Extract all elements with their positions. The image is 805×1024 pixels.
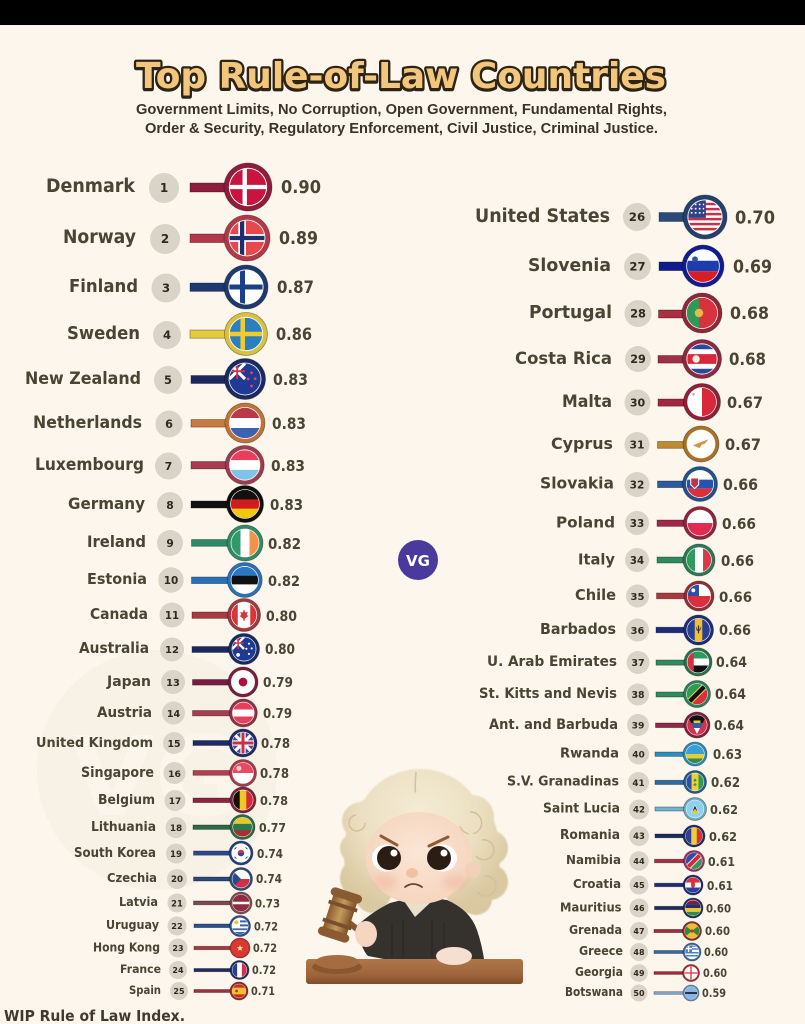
- row: Mauritius: 0.60: [706, 902, 731, 916]
- row: Sweden: [67, 312, 312, 356]
- row: Grenada: 0.60: [705, 924, 730, 938]
- row: Latvia: Latvia: [119, 894, 158, 909]
- row: Croatia: 45: [633, 880, 645, 890]
- row: Greece: Greece: [579, 944, 623, 958]
- row: Rwanda: 40: [632, 750, 645, 760]
- watermark: VG logo circle: VG: [69, 713, 245, 841]
- flag: Cyprus: [687, 430, 715, 458]
- row: Malta: Malta: [562, 392, 612, 411]
- row: Uruguay: 22: [171, 921, 183, 931]
- row: Barbados: [540, 615, 751, 645]
- row: Ireland: Ireland: [87, 532, 146, 551]
- top black bar: [0, 0, 805, 25]
- flag: Grenada: [685, 924, 699, 938]
- flag: France: [232, 963, 247, 977]
- row: Georgia: 0.60: [703, 966, 727, 980]
- flag: Austria: [233, 702, 254, 724]
- flag: South Korea: [232, 844, 250, 862]
- flag: Latvia: [233, 895, 249, 911]
- row: Namibia: [566, 850, 735, 872]
- row: Portugal: 0.68: [730, 304, 769, 324]
- row: Portugal: Portugal: [529, 303, 612, 323]
- row: Mauritius: [560, 898, 731, 918]
- row: Chile: [575, 581, 752, 611]
- row: Namibia: 0.61: [708, 855, 735, 869]
- row: S.V. Granadinas: S.V. Granadinas: [507, 774, 619, 790]
- row: Luxembourg: Luxembourg: [35, 455, 144, 474]
- row: Australia: 0.80: [265, 642, 295, 658]
- row: Luxembourg: 7: [165, 460, 172, 473]
- row: Croatia: 0.61: [707, 879, 733, 893]
- subtitle: Order & Security, Regulatory Enforcement, Civil Justice, Criminal Justice.: [145, 121, 658, 137]
- flag: Germany: [231, 490, 259, 518]
- flag: Georgia: [684, 966, 698, 980]
- row: France: 0.72: [252, 964, 276, 977]
- flag: Ant. and Barbuda: [687, 715, 707, 735]
- row: Singapore: 0.78: [260, 767, 289, 782]
- row: Japan: Japan: [106, 674, 151, 690]
- row: Finland: [69, 265, 314, 309]
- face: [366, 812, 472, 904]
- row: Belgium: [98, 787, 288, 813]
- row: Australia: Australia: [79, 639, 149, 657]
- flag: New Zealand: [229, 363, 261, 395]
- row: Lithuania: 18: [170, 824, 182, 834]
- row: Finland: 3: [162, 281, 170, 295]
- row: Hong Kong: 0.72: [253, 942, 277, 955]
- row: United States: 0.70: [735, 208, 775, 228]
- row: Poland: [556, 506, 756, 540]
- row: Slovakia: 0.66: [723, 476, 758, 494]
- right hand: [436, 947, 472, 965]
- eyes: [372, 844, 457, 872]
- row: Denmark: 1: [160, 181, 168, 195]
- flag: Czechia: [232, 870, 250, 888]
- flag: St. Kitts and Nevis: [687, 684, 707, 704]
- row: U. Arab Emirates: U. Arab Emirates: [487, 654, 617, 670]
- row: United Kingdom: [36, 729, 290, 757]
- row: Romania: 0.62: [709, 830, 737, 845]
- row: Norway: [63, 215, 318, 261]
- row: Costa Rica: 29: [630, 353, 646, 366]
- row: Czechia: 0.74: [256, 872, 282, 886]
- row: Ant. and Barbuda: Ant. and Barbuda: [489, 717, 618, 733]
- row: Malta: [562, 384, 763, 420]
- row: Austria: 14: [167, 709, 180, 720]
- row: St. Kitts and Nevis: St. Kitts and Nevis: [479, 686, 617, 702]
- row: Malta: 30: [630, 396, 645, 410]
- row: United States: 26: [629, 210, 645, 224]
- row: Latvia: 21: [171, 898, 183, 908]
- row: Portugal: [529, 293, 769, 333]
- row: Estonia: 10: [164, 575, 178, 587]
- watermark: VG logo circle: [37, 650, 277, 890]
- flag: Malta: [688, 388, 716, 416]
- flag: Netherlands: [230, 408, 260, 438]
- row: Austria: Austria: [97, 705, 152, 721]
- row: Ireland: [87, 525, 301, 561]
- row: Namibia: 44: [633, 856, 645, 866]
- row: Sweden: 0.86: [276, 325, 312, 344]
- subtitle: Government Limits, No Corruption, Open Government, Fundamental Rights,: [136, 102, 667, 118]
- row: Germany: Germany: [68, 494, 146, 513]
- row: Netherlands: 6: [165, 418, 173, 431]
- VG badge: [398, 540, 438, 580]
- row: Germany: 8: [166, 499, 174, 512]
- row: Japan: 13: [166, 678, 180, 689]
- row: Luxembourg: 0.83: [271, 457, 305, 475]
- row: Italy: Italy: [578, 550, 615, 568]
- eyebrows: [381, 836, 448, 846]
- row: Latvia: [119, 892, 280, 914]
- row: Costa Rica: [515, 340, 766, 378]
- row: Costa Rica: Costa Rica: [515, 349, 612, 369]
- row: Grenada: [569, 922, 730, 940]
- flag: Greece: [685, 945, 699, 959]
- row: Norway: 2: [161, 232, 169, 246]
- row: Romania: 43: [633, 831, 645, 841]
- row: Slovenia: 27: [629, 260, 646, 274]
- row: Sweden: Sweden: [67, 324, 140, 344]
- flag: Mauritius: [685, 900, 701, 916]
- row: Spain: 0.71: [251, 985, 275, 998]
- row: Uruguay: Uruguay: [106, 918, 159, 932]
- robe: [358, 898, 484, 959]
- row: Italy: [578, 544, 754, 576]
- row: Singapore: Singapore: [81, 765, 154, 781]
- flag: Slovenia: [687, 250, 719, 282]
- row: Saint Lucia: [543, 798, 738, 820]
- row: United Kingdom: United Kingdom: [36, 735, 153, 751]
- flag: Namibia: [686, 853, 702, 869]
- flag: Belgium: [233, 790, 253, 810]
- row: Lithuania: 0.77: [259, 820, 286, 835]
- row: Belgium: Belgium: [98, 792, 155, 808]
- row: Estonia: 0.82: [268, 574, 300, 590]
- row: Slovakia: [540, 466, 758, 502]
- flag: U. Arab Emirates: [687, 651, 709, 673]
- row: Finland: 0.87: [277, 278, 314, 298]
- row: Ireland: 9: [166, 538, 174, 550]
- row: Slovakia: 32: [630, 480, 644, 492]
- row: Uruguay: [106, 916, 278, 936]
- row: Greece: 48: [633, 948, 645, 957]
- row: S.V. Granadinas: [507, 770, 740, 794]
- row: Ant. and Barbuda: 39: [632, 720, 644, 732]
- row: Botswana: 0.59: [702, 986, 726, 1000]
- flag: Poland: [688, 510, 712, 536]
- flag: Sweden: [230, 318, 262, 350]
- wig: [340, 769, 508, 916]
- row: Georgia: [575, 964, 727, 982]
- flag: Ireland: [231, 529, 259, 557]
- flag: Rwanda: [686, 745, 704, 763]
- flag: Uruguay: [232, 918, 248, 934]
- VG badge: VG: [406, 552, 430, 570]
- flag: Italy: [687, 548, 711, 572]
- row: Costa Rica: 0.68: [729, 350, 766, 369]
- row: Romania: Romania: [560, 828, 620, 843]
- row: Slovenia: [528, 245, 772, 287]
- row: South Korea: 19: [170, 850, 182, 860]
- row: United Kingdom: 0.78: [261, 737, 290, 752]
- row: Denmark: [46, 163, 321, 211]
- left hand: [355, 921, 377, 947]
- row: Georgia: Georgia: [575, 965, 623, 979]
- row: Lithuania: Lithuania: [91, 820, 156, 835]
- row: Lithuania: [91, 814, 286, 840]
- row: Italy: 34: [630, 556, 644, 567]
- row: Norway: 0.89: [279, 229, 318, 249]
- row: New Zealand: 0.83: [273, 370, 308, 389]
- row: Saint Lucia: 0.62: [710, 803, 738, 818]
- flag: Spain: [232, 984, 246, 998]
- row: Japan: 0.79: [263, 675, 293, 691]
- row: Netherlands: Netherlands: [33, 413, 142, 433]
- flag: Barbados: [687, 619, 710, 641]
- row: Grenada: Grenada: [569, 923, 622, 937]
- title: Top Rule-of-Law Countries: [136, 56, 666, 97]
- row: Barbados: 0.66: [719, 623, 751, 639]
- flag: Portugal: [687, 298, 717, 328]
- illustration: judge with gavel: [306, 769, 523, 984]
- row: Croatia: [573, 875, 733, 895]
- row: Norway: Norway: [63, 227, 136, 248]
- flag: Estonia: [231, 567, 258, 593]
- flag: United States: [688, 200, 722, 234]
- row: France: France: [120, 962, 161, 976]
- row: Austria: [97, 699, 292, 727]
- fringe: [364, 792, 476, 842]
- row: Germany: 0.83: [270, 496, 303, 514]
- row: Botswana: [565, 984, 726, 1002]
- row: New Zealand: 5: [164, 373, 172, 387]
- row: Estonia: Estonia: [87, 570, 147, 588]
- row: Estonia: [87, 562, 300, 598]
- row: South Korea: South Korea: [74, 846, 156, 861]
- row: Canada: [90, 598, 297, 632]
- row: Botswana: Botswana: [565, 985, 623, 999]
- flag: Romania: [686, 828, 702, 844]
- flag: Chile: [688, 585, 710, 607]
- flag: Slovakia: [687, 471, 713, 497]
- row: Singapore: [81, 760, 289, 786]
- row: France: [120, 960, 276, 980]
- row: Malta: 0.67: [727, 393, 763, 412]
- row: Cyprus: 31: [629, 438, 645, 452]
- row: Spain: [129, 982, 275, 1000]
- row: U. Arab Emirates: 37: [631, 658, 645, 669]
- row: Chile: 0.66: [719, 589, 752, 606]
- row: Croatia: Croatia: [573, 876, 621, 891]
- row: Uruguay: 0.72: [254, 920, 278, 933]
- row: Poland: 33: [630, 518, 644, 530]
- flag: Lithuania: [233, 818, 252, 836]
- row: Poland: Poland: [556, 514, 615, 532]
- row: Czechia: [107, 868, 282, 890]
- row: Belgium: 0.78: [260, 794, 288, 809]
- row: Netherlands: [33, 403, 306, 443]
- row: Canada: 11: [165, 611, 179, 622]
- nose and mouth: [406, 868, 418, 878]
- row: South Korea: 0.74: [257, 847, 283, 861]
- sound block: [312, 955, 362, 974]
- row: Saint Lucia: Saint Lucia: [543, 802, 620, 816]
- flag: United Kingdom: [232, 732, 254, 754]
- flag: Saint Lucia: [686, 800, 704, 818]
- row: Greece: 0.60: [704, 945, 728, 959]
- row: U. Arab Emirates: 0.64: [716, 655, 747, 671]
- row: Rwanda: Rwanda: [560, 746, 619, 762]
- row: Spain: 25: [173, 987, 185, 996]
- row: Australia: 12: [165, 645, 179, 656]
- row: Chile: 35: [631, 592, 644, 603]
- row: New Zealand: [25, 358, 308, 400]
- row: Czechia: 20: [171, 875, 183, 885]
- row: Portugal: 28: [630, 306, 646, 320]
- flag: Japan: [232, 671, 254, 693]
- subtitle: [136, 102, 667, 137]
- row: Czechia: Czechia: [107, 870, 157, 885]
- row: Latvia: 0.73: [255, 896, 280, 910]
- flag: Singapore: [233, 763, 253, 783]
- row: St. Kitts and Nevis: 0.64: [715, 687, 746, 703]
- row: Mauritius: 46: [633, 904, 645, 913]
- row: U. Arab Emirates: [487, 648, 747, 676]
- flag: Costa Rica: [687, 344, 717, 374]
- row: Hong Kong: [93, 938, 277, 958]
- flag: Canada: [232, 602, 256, 628]
- row: Mauritius: Mauritius: [560, 900, 622, 914]
- row: Rwanda: 0.63: [713, 748, 742, 763]
- row: Denmark: Denmark: [46, 176, 136, 197]
- row: Singapore: 16: [168, 769, 181, 780]
- row: Cyprus: Cyprus: [551, 434, 613, 453]
- row: Japan: [106, 667, 293, 697]
- row: Denmark: 0.90: [281, 177, 321, 198]
- row: Slovenia: Slovenia: [528, 255, 611, 276]
- flag: Norway: [230, 220, 264, 256]
- flag: S.V. Granadinas: [686, 773, 704, 791]
- row: Hong Kong: Hong Kong: [93, 940, 160, 954]
- row: Ant. and Barbuda: 0.64: [714, 718, 744, 734]
- row: Belgium: 17: [169, 797, 181, 807]
- row: Grenada: 47: [633, 927, 645, 936]
- row: United States: [475, 195, 775, 239]
- row: Saint Lucia: 42: [633, 806, 645, 816]
- flag: Denmark: [230, 169, 266, 205]
- row: S.V. Granadinas: 0.62: [711, 776, 740, 791]
- row: Ant. and Barbuda: [489, 712, 744, 738]
- row: United Kingdom: 15: [167, 739, 181, 750]
- flag: Hong Kong: [232, 940, 248, 956]
- row: Canada: 0.80: [266, 609, 297, 625]
- row: Luxembourg: [35, 446, 305, 484]
- row: South Korea: [74, 841, 283, 865]
- row: Barbados: 36: [631, 626, 644, 637]
- row: Greece: [579, 943, 728, 961]
- row: Georgia: 49: [633, 969, 645, 978]
- row: Spain: Spain: [129, 983, 161, 997]
- row: Cyprus: [551, 426, 761, 462]
- row: Austria: 0.79: [263, 707, 292, 722]
- desk: [306, 959, 523, 984]
- row: Finland: Finland: [69, 276, 138, 297]
- row: Poland: 0.66: [722, 515, 756, 533]
- row: Barbados: Barbados: [540, 620, 616, 638]
- cheeks: [372, 874, 468, 890]
- collar: [404, 901, 431, 917]
- row: Cyprus: 0.67: [725, 435, 761, 454]
- row: France: 24: [172, 966, 184, 975]
- flag: Luxembourg: [230, 450, 260, 480]
- row: Germany: [68, 486, 303, 522]
- row: Slovakia: Slovakia: [540, 474, 614, 492]
- row: Romania: [560, 825, 737, 847]
- gavel: [317, 886, 368, 944]
- row: St. Kitts and Nevis: 38: [631, 690, 645, 701]
- row: Chile: Chile: [575, 586, 616, 604]
- row: New Zealand: New Zealand: [25, 369, 141, 389]
- wig curls: [349, 772, 496, 896]
- row: S.V. Granadinas: 41: [632, 779, 645, 789]
- row: Rwanda: [560, 742, 742, 766]
- row: Botswana: 50: [633, 989, 645, 998]
- row: United States: United States: [475, 206, 610, 227]
- row: Namibia: Namibia: [566, 852, 621, 867]
- row: Canada: Canada: [90, 605, 148, 623]
- row: Sweden: 4: [163, 328, 171, 342]
- row: Italy: 0.66: [721, 553, 754, 570]
- row: Netherlands: 0.83: [272, 415, 306, 433]
- row: Australia: [79, 634, 295, 664]
- row: Hong Kong: 23: [172, 944, 184, 953]
- flag: Australia: [232, 637, 256, 661]
- row: Ireland: 0.82: [268, 535, 301, 553]
- flag: Finland: [229, 270, 263, 304]
- flag: Botswana: [685, 987, 697, 999]
- flag: Croatia: [685, 877, 701, 893]
- row: St. Kitts and Nevis: [479, 680, 746, 708]
- row: Slovenia: 0.69: [733, 258, 772, 278]
